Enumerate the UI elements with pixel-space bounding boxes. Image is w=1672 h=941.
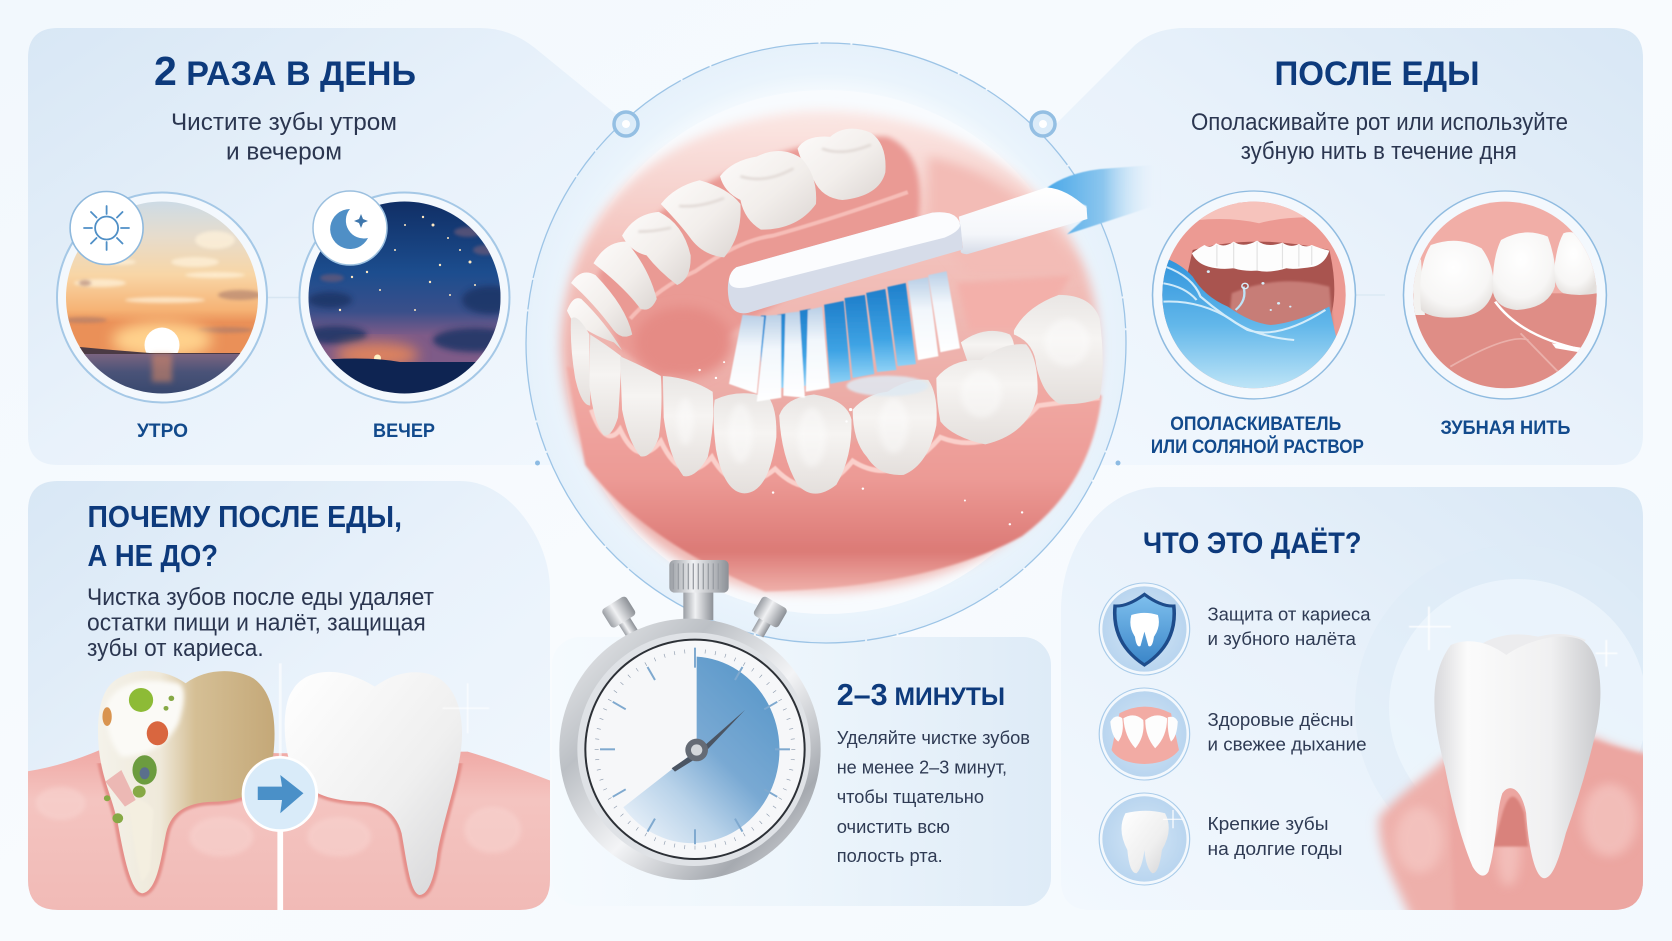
text: healthy gums: Здоровые дёсны: [1208, 709, 1354, 730]
text: morning and evening: и вечером: [226, 138, 342, 166]
image: dental floss: [1403, 191, 1606, 399]
text: healthy gums: [1208, 709, 1366, 755]
text: brushing duration: полость рта.: [837, 845, 943, 866]
text: explanation: остатки пищи и налёт, защищая: [87, 610, 426, 637]
label: rinse or saline: ОПОЛАСКИВАТЕЛЬ: [1170, 413, 1341, 435]
label: morning: УТРО: [137, 420, 188, 442]
lower gum: [567, 366, 1102, 591]
text: caries protection: Защита от кариеса: [1208, 604, 1371, 625]
text: morning and evening: [171, 109, 397, 166]
text: brushing duration: очистить всю: [837, 816, 950, 837]
foam: [698, 361, 1023, 525]
text: strong teeth: Крепкие зубы: [1208, 813, 1328, 834]
dirty tooth: [98, 671, 275, 893]
image: evening sky: [300, 192, 518, 402]
label: rinse or saline: ИЛИ СОЛЯНОЙ РАСТВОР: [1151, 434, 1364, 458]
blue wedge: [623, 657, 779, 843]
icon: arrow: [243, 757, 317, 831]
panel: after meals: [1040, 28, 1643, 465]
text: brushing duration: Уделяйте чистке зубов: [837, 727, 1030, 748]
ticks: [597, 648, 793, 848]
lower teeth: [571, 295, 1103, 494]
text: rinse or floss: зубную нить в течение дня: [1241, 138, 1517, 165]
panel: benefits: [1061, 487, 1672, 930]
illustration: mouth with toothbrush: [561, 111, 1160, 593]
icon: moon: [313, 191, 387, 265]
illustration: healthy tooth: [1372, 579, 1643, 910]
crown: [669, 560, 729, 620]
image: mouth rinse: [1153, 191, 1355, 399]
text: caries protection: [1208, 604, 1371, 649]
node: top left: [614, 112, 638, 136]
node: top right: [1031, 112, 1055, 136]
heading: after meals: ПОСЛЕ ЕДЫ: [1274, 55, 1480, 93]
stopwatch: [559, 560, 821, 880]
image: morning sunrise: [57, 192, 267, 402]
icon: tooth: [1099, 793, 1190, 885]
heading: 2 times a day: 2 РАЗА В ДЕНЬ: [154, 48, 416, 94]
heading: 2-3 minutes: 2–3 МИНУТЫ: [837, 677, 1005, 712]
heading: why after meals: ПОЧЕМУ ПОСЛЕ ЕДЫ,: [88, 499, 402, 534]
text: strong teeth: [1208, 813, 1342, 859]
toothbrush handle: [959, 164, 1160, 254]
text: explanation: зубы от кариеса.: [87, 635, 264, 662]
icon: sun: [70, 192, 143, 264]
icon: gums: [1099, 688, 1190, 780]
text block: 2-3 minutes: [837, 677, 1030, 866]
heading: why after meals: А НЕ ДО?: [88, 538, 218, 573]
central circle: [526, 43, 1126, 643]
text: brushing duration: чтобы тщательно: [837, 786, 984, 807]
toothbrush bristles: [729, 271, 960, 402]
text: explanation: [87, 584, 434, 662]
text: brushing duration: [837, 727, 1030, 866]
text: strong teeth: на долгие годы: [1208, 838, 1342, 859]
label: evening: ВЕЧЕР: [373, 420, 435, 442]
hand: [672, 710, 745, 772]
clean tooth: [285, 672, 489, 895]
heading: benefits: ЧТО ЭТО ДАЁТ?: [1143, 527, 1362, 560]
panel: 2 times a day: [28, 28, 660, 465]
text: morning and evening: Чистите зубы утром: [171, 109, 397, 136]
heading: why after meals: [88, 499, 402, 573]
label: rinse or saline: [1151, 413, 1364, 458]
panel: 2-3 minutes: [552, 637, 1051, 906]
icon: shield: [1099, 583, 1190, 675]
text: explanation: Чистка зубов после еды удаляет: [87, 584, 434, 611]
text: caries protection: и зубного налёта: [1208, 628, 1357, 649]
panel: why after meals: [25, 481, 557, 913]
upper teeth: [567, 129, 886, 350]
side buttons: [601, 595, 788, 641]
text: rinse or floss: [1191, 109, 1568, 165]
toothbrush head: [728, 212, 963, 313]
text: rinse or floss: Ополаскивайте рот или используйте: [1191, 109, 1568, 136]
text: healthy gums: и свежее дыхание: [1208, 734, 1366, 755]
label: floss: ЗУБНАЯ НИТЬ: [1440, 417, 1570, 439]
illustration: dirty and clean tooth: [25, 663, 557, 913]
text: brushing duration: не менее 2–3 минут,: [837, 757, 1007, 778]
